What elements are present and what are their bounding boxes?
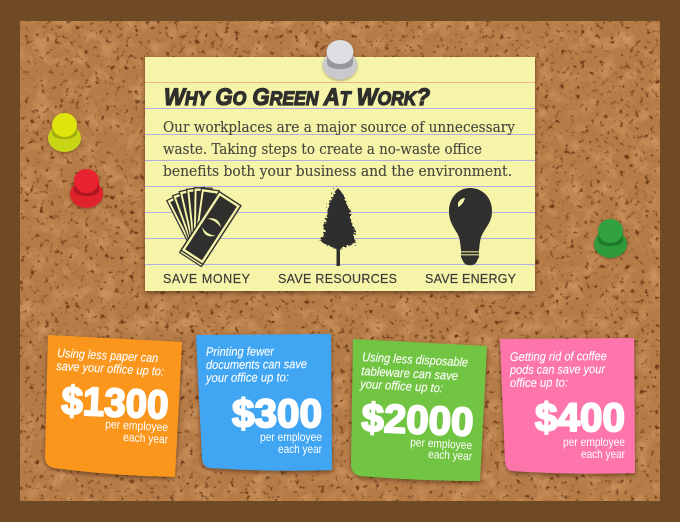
intro text: waste. Taking steps to create a no-waste office: [163, 142, 482, 158]
icon: light bulb: [449, 188, 492, 265]
blue note amount: $300: [232, 392, 322, 436]
pink note text: Getting rid of coffee: [510, 349, 607, 364]
green note text line two: tableware can save: [361, 364, 458, 383]
icon: money: [167, 187, 241, 267]
panel: orange sticky note: [45, 335, 182, 477]
green note per employee: per employee: [410, 435, 473, 452]
intro text: benefits both your business and the environment.: [163, 164, 512, 180]
orange note each year: each year: [123, 430, 169, 446]
green note amount: $2000: [361, 396, 474, 445]
blue note text line three: your office up to:: [205, 370, 289, 385]
intro text: Our workplaces are a major source of unnecessary: [163, 120, 516, 136]
orange note text line two: save your office up to:: [56, 359, 164, 379]
green note text: Using less disposable: [362, 350, 468, 370]
icon: tree: [320, 187, 356, 266]
icon: silver pin: [323, 40, 357, 80]
pink note amount: $400: [535, 396, 625, 440]
pink note text line three: office up to:: [510, 375, 568, 390]
pink note text line two: pods can save your: [509, 362, 606, 377]
icon: yellow pin: [48, 113, 81, 152]
label: save energy: SAVE ENERGY: [425, 272, 517, 286]
green note each year: each year: [428, 447, 473, 463]
blue note text: Printing fewer: [206, 344, 275, 359]
panel: index card: [145, 57, 535, 291]
intro text: [163, 120, 516, 180]
pink note each year: each year: [581, 447, 625, 461]
label: save resources: SAVE RESOURCES: [278, 272, 397, 286]
title: WHY GO GREEN AT WORK?: [164, 84, 430, 111]
green note text line three: your office up to:: [359, 377, 443, 395]
panel: green sticky note: [351, 339, 487, 481]
icon: green pin: [594, 219, 627, 258]
orange note text: Using less paper can: [57, 346, 158, 365]
blue note text line two: documents can save: [206, 357, 307, 372]
blue note each year: each year: [278, 442, 322, 456]
pink note per employee: per employee: [563, 435, 625, 449]
blue note per employee: per employee: [260, 430, 322, 444]
panel: blue sticky note: [196, 334, 332, 471]
orange note per employee: per employee: [105, 417, 169, 434]
panel: pink sticky note: [500, 338, 635, 474]
icon: red pin: [70, 169, 103, 208]
orange note amount: $1300: [61, 379, 169, 428]
label: save money: SAVE MONEY: [163, 272, 251, 286]
